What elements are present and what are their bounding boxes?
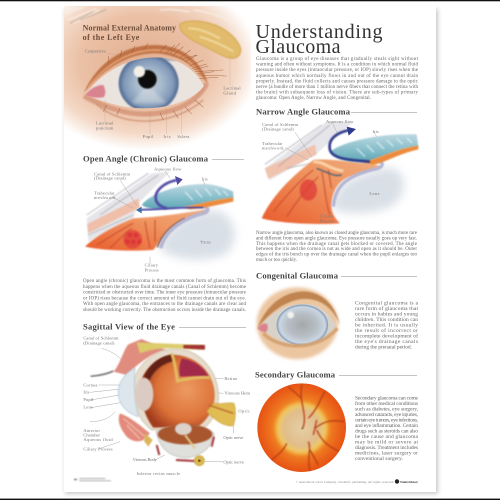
iris orange stripe [183, 197, 233, 209]
narrow angle text block: edges of the iris bunch up over the drainage canal when the pupil enlarges too [256, 253, 418, 258]
labels: Process [145, 267, 159, 272]
open angle text block: With open angle glaucoma, the entrances to the drainage canals are clear and [83, 302, 246, 307]
illustration: normal external anatomy of the left eye [64, 6, 250, 148]
congenital text block: Congenital glaucoma is a [355, 300, 419, 306]
secondary text block: drugs such as steroids can also [355, 428, 418, 434]
sclera and iris [85, 57, 204, 108]
caruncle [257, 324, 268, 333]
intro text block: pressure inside the eyes (intraocular pressure, or IOP) slowly rises when the [256, 68, 419, 73]
optic nerve cross section [194, 456, 204, 466]
congenital text block [355, 300, 419, 350]
labels: Trabecular [262, 141, 283, 146]
illustration: fundus of secondary glaucoma [257, 383, 346, 472]
anatomy labels: Iris [163, 134, 171, 139]
dark choroid [144, 354, 174, 382]
lens [160, 210, 234, 259]
labels: Aqueous flow [326, 119, 354, 124]
eyeball outer wall [132, 349, 218, 430]
secondary text block: medicines, laser surgery or [355, 450, 418, 456]
labels: (Drainage canal) [94, 176, 126, 181]
anatomy labels: Gland [223, 90, 237, 95]
corneal highlight [134, 66, 145, 77]
labels [83, 335, 250, 476]
anatomy labels [85, 48, 241, 139]
congenital text block: during the prenatal period. [355, 344, 413, 350]
labels: Trabecular [94, 191, 115, 196]
diagram: open angle glaucoma [85, 167, 234, 272]
labels: Cornea [83, 383, 97, 388]
diagram: sagittal view of the eye [74, 335, 250, 481]
labels: Inferior rectus muscle [137, 471, 180, 476]
labels: (Drainage canal) [262, 126, 294, 131]
retina maroon patch [179, 358, 209, 378]
leader lines [285, 123, 377, 215]
labels: Canal of Schlemm [94, 171, 130, 176]
labels [262, 119, 380, 223]
congenital text block: the result of incorrect or [355, 327, 418, 334]
illustration: congenital glaucoma eye [257, 287, 340, 359]
pupil [138, 70, 157, 89]
labels: Chamber [83, 432, 100, 437]
highlight [287, 312, 294, 318]
secondary text block: advanced cataracts, eye injuries, [355, 412, 419, 418]
upper lid [257, 292, 340, 328]
ciliary process [123, 230, 142, 249]
open angle text block: Open angle (chronic) glaucoma is the most common form of glaucoma. This [83, 279, 246, 284]
leader lines [112, 171, 205, 263]
labels: Iris [83, 389, 90, 394]
secondary text block: and eye inflammation. Certain [355, 422, 418, 429]
title: Understanding [256, 21, 382, 43]
intro text block: properly. Instead, the fluid collects and causes pressure damage to the optic [256, 79, 419, 84]
narrow angle text block: Narrow angle glaucoma, also known as closed angle glaucoma, is much more rare [256, 231, 418, 236]
anatomy leader lines [105, 53, 230, 134]
anatomy labels: Pupil [143, 134, 154, 139]
title: Glaucoma [256, 36, 341, 58]
narrow angle text block: and different from open angle glaucoma. Eye pressure usually goes up very fast. [256, 236, 417, 241]
eyelashes [103, 43, 227, 120]
secondary text block: diagnosis. Treatment includes [355, 445, 418, 451]
open angle text block: should be working correctly. The obstruction occurs inside the drainage canals. [83, 308, 246, 313]
secondary text block: conventional surgery. [355, 456, 404, 462]
labels: Process [320, 218, 334, 223]
eyelash [91, 371, 113, 376]
retinal vessels [270, 385, 345, 472]
labels: meshwork [262, 145, 284, 150]
labels: Optic nerve [223, 435, 243, 440]
labels: Canal of Schlemm [83, 335, 119, 340]
secondary text block: be the cause and glaucoma [355, 434, 419, 440]
labels: Ciliary Process [83, 446, 113, 451]
panel heading: normal external anatomy: Normal External Anatomy [83, 24, 176, 33]
iris teal layer [330, 134, 418, 162]
congenital text block: rare form of glaucoma that [355, 305, 418, 312]
congenital text block: the eye's drainage canals [355, 339, 418, 345]
anatomy labels: Lacrimal [96, 121, 114, 126]
dark channel [157, 218, 185, 247]
lens [135, 378, 153, 411]
optic nerve [207, 403, 235, 426]
labels: Lens [83, 405, 93, 410]
anatomy labels: punctum [96, 126, 114, 131]
ciliary body [262, 160, 382, 224]
vitreous interior [141, 355, 215, 428]
labels: Lens [369, 191, 380, 196]
leader lines [90, 348, 233, 462]
eyelid tissue top [113, 339, 167, 375]
labels: Optic [238, 408, 250, 413]
lower eyelid tissue [119, 413, 150, 441]
labels: Aqueous fluid [83, 437, 113, 442]
secondary text block: from other medical conditions [355, 400, 418, 407]
open angle text block: constricted or obstructed over time. The inner eye pressure (intraocular pressure [83, 291, 247, 296]
footer: copyright and publisher logo [296, 479, 419, 484]
intro text block: Glaucoma is a group of eye diseases that gradually steals sight without [256, 57, 419, 62]
ciliary muscle fibers [97, 220, 155, 248]
cornea and sclera bands [87, 172, 170, 242]
intro text block: nerve (a bundle of more than 1 million nerve fibers that connect the retina with [256, 85, 418, 90]
labels: Iris [373, 129, 379, 134]
narrow angle text block [256, 231, 418, 263]
heading: sagittal view: Sagittal View of the Eye [83, 322, 175, 332]
heading: congenital glaucoma: Congenital Glaucoma [256, 270, 339, 280]
iris teal layer [142, 184, 233, 209]
panel heading: normal external anatomy [83, 24, 176, 42]
aqueous flow arrow [330, 127, 370, 162]
labels: Pupil [83, 397, 94, 402]
heading: secondary glaucoma: Secondary Glaucoma [255, 370, 336, 380]
heading: open angle glaucoma: Open Angle (Chronic) Glaucoma [83, 154, 209, 164]
footer: copyright and publisher logo: Wolters Kluwer [400, 480, 419, 484]
labels [94, 167, 211, 272]
secondary text block: Secondary glaucoma can come [355, 396, 419, 402]
congenital text block: be inherited. It is usually [355, 322, 418, 328]
title [256, 21, 382, 58]
iris orange stripe [362, 146, 418, 165]
heading: narrow angle glaucoma: Narrow Angle Glaucoma [256, 106, 351, 116]
labels: Ciliary [320, 214, 334, 219]
lens [332, 168, 404, 213]
labels: Aqueous flow [154, 167, 182, 172]
ciliary body [85, 209, 207, 251]
secondary text block: such as diabetes, eye surgery, [355, 406, 419, 412]
upper eyelid fold [84, 45, 208, 93]
narrow angle text block: much or too quickly. [256, 258, 297, 263]
labels: (Drainage canal) [83, 341, 115, 346]
intro text block [256, 57, 419, 101]
yellow retinal bands [172, 353, 210, 381]
intro text block: warning and often without symptoms. It is a condition in which normal fluid [256, 63, 418, 68]
lens capsule [333, 160, 382, 207]
narrow angle text block: between the iris and the cornea is not as wide and open as it should be. Outer [256, 247, 417, 252]
lacrimal gland [180, 21, 241, 58]
intro text block: aqueous humor which normally flows in and out of the eye cannot drain [256, 74, 418, 79]
labels: meshwork [94, 195, 116, 200]
anatomy labels: Sclera [177, 134, 189, 139]
footer: copyright and publisher logo: © Anatomical Chart Company. Scientific publishing. All rights reserved. [296, 481, 394, 484]
congenital text block: occurs in babies and young [355, 312, 418, 318]
secondary text block [355, 396, 419, 462]
skin surrounding the eye [64, 6, 250, 148]
anatomy labels: Lacrimal [223, 85, 241, 90]
small publisher mark left [74, 478, 111, 481]
secondary text block: certain eye tumors, eye infections, [355, 416, 419, 424]
labels: Iris [202, 177, 208, 182]
labels: Anterior [83, 428, 100, 433]
ciliary process [300, 179, 317, 201]
secondary text block: may be mild or severe at [355, 440, 418, 446]
skin surrounding [257, 287, 338, 359]
labels: Ciliary [145, 263, 159, 268]
retina disc [257, 383, 346, 472]
labels: Retina [224, 376, 237, 381]
labels: Optic nerve [223, 459, 244, 464]
intro text block: the brain) with subsequent loss of vision. There are sub-types of primary [256, 91, 418, 96]
labels: Vitreous Body [133, 457, 157, 462]
ciliary muscle fibers [273, 170, 332, 217]
anatomy labels: Conjunctiva [85, 48, 106, 53]
central dot [301, 427, 303, 429]
lower lid [263, 328, 337, 346]
cornea [118, 368, 138, 417]
labels: Canal of Schlemm [262, 122, 298, 127]
sclera and cloudy iris [261, 304, 336, 345]
lacrimal caruncle [84, 85, 105, 98]
optic nerve head [270, 385, 345, 472]
labels: Lens [201, 239, 211, 244]
narrow angle text block: This happens when the drainage canal gets blocked or covered. The angle [256, 242, 418, 247]
labels: Vitreous Hum [224, 391, 250, 396]
congenital text block: incomplete development of [355, 332, 418, 340]
open angle text block: or IOP) rises because the correct amount of fluid cannot drain out of the eye. [83, 296, 246, 301]
lower eyelid rim [84, 83, 207, 114]
open angle text block: happens when the aqueous fluid drainage canals (Canal of Schlemm) become [83, 285, 247, 290]
panel heading: normal external anatomy: of the Left Eye [83, 33, 140, 42]
cutaway lower bowl [156, 426, 214, 458]
diagram: narrow angle glaucoma [262, 119, 418, 224]
aqueous flow arrows [136, 176, 203, 213]
poster sheet with shadow [64, 6, 438, 494]
open angle text block [83, 279, 247, 313]
cornea and sclera bands [265, 122, 353, 180]
intro text block: glaucoma: Open Angle, Narrow Angle, and Congenital. [256, 96, 371, 101]
lens capsule [161, 207, 208, 248]
congenital text block: children. This condition can [355, 317, 418, 323]
